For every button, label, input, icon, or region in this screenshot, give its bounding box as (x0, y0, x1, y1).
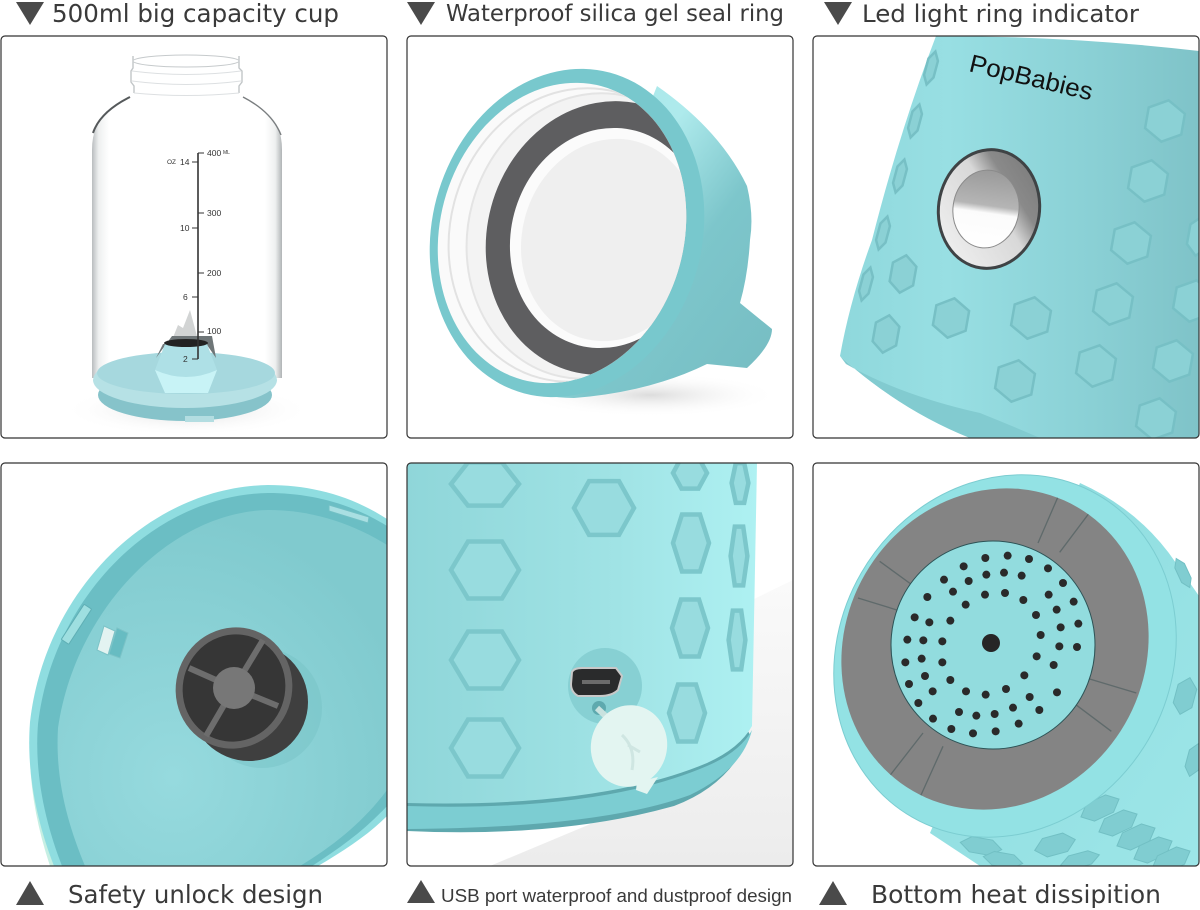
measuring scale: 100 (207, 326, 221, 336)
measuring scale: 300 (207, 208, 221, 218)
illustration: lid with seal ring (430, 68, 772, 398)
measuring scale: 6 (183, 292, 188, 302)
icon: power button with LED ring (936, 148, 1042, 270)
brand logo: PopBabies (967, 50, 1096, 106)
measuring scale: 200 (207, 268, 221, 278)
measuring scale: 2 (183, 354, 188, 364)
panel: seal ring (430, 68, 772, 406)
illustration: base interior (29, 485, 387, 866)
illustration: glass jar (92, 55, 282, 422)
panel: bottom heat dissipation (833, 474, 1198, 866)
measuring scale: OZ (167, 159, 176, 166)
top heading: Waterproof silica gel seal ring: Waterproof silica gel seal ring (446, 1, 784, 27)
icon: drive coupling (176, 627, 322, 768)
measuring scale: 10 (180, 223, 190, 233)
icon: rubber port plug (590, 701, 668, 794)
icon: ventilation disc (891, 541, 1095, 749)
top heading: Led light ring indicator: Led light ring indicator (862, 0, 1139, 28)
bottom heading: USB port waterproof and dustproof design (407, 880, 792, 906)
panel: LED ring indicator (813, 36, 1200, 443)
bottom heading: Safety unlock design: Safety unlock design (68, 880, 323, 909)
panel: 500ml cup (92, 54, 282, 424)
panel: safety unlock (29, 485, 386, 866)
illustration: teal body with hexagons (407, 457, 757, 832)
blade (155, 310, 217, 393)
panel: USB port (407, 457, 793, 866)
illustration: teal body with logo (840, 36, 1200, 443)
teal base (93, 352, 277, 422)
bottom heading: Bottom heat dissipition: Bottom heat dissipition (871, 880, 1161, 909)
measuring scale: 14 (180, 157, 190, 167)
measuring scale: 400 (207, 148, 221, 158)
icon: micro USB port (568, 648, 642, 724)
illustration: bottom housing (833, 474, 1198, 866)
bottom heading: USB port waterproof and dustproof design: USB port waterproof and dustproof design (441, 886, 792, 906)
measuring scale: ML (223, 150, 230, 156)
measuring scale (167, 148, 230, 364)
